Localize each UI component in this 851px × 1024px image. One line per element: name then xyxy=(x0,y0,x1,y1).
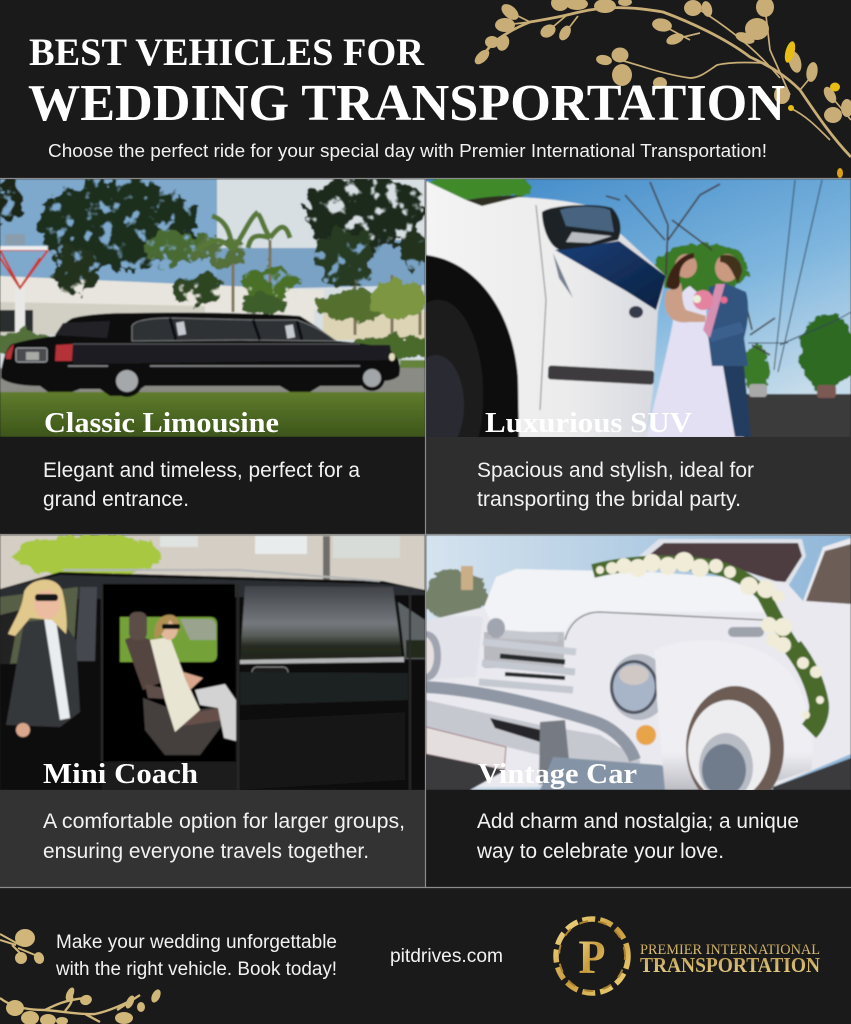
panel: luxurious SUV xyxy=(393,171,851,534)
footer call to action xyxy=(55,932,337,980)
footer call to action: with the right vehicle. Book today! xyxy=(55,959,337,980)
description text: grand entrance. xyxy=(43,488,189,511)
description text xyxy=(43,459,360,511)
title line 2: WEDDING TRANSPORTATION xyxy=(28,75,785,132)
logo wordmark: TRANSPORTATION xyxy=(640,953,820,977)
panel: vintage car xyxy=(424,535,851,887)
title xyxy=(28,31,785,132)
description text: Elegant and timeless, perfect for a xyxy=(43,459,360,482)
website: pitdrives.com xyxy=(390,946,503,967)
footer decoration: gold branches xyxy=(0,929,163,1024)
photo: limousine xyxy=(0,174,435,437)
panel description xyxy=(0,790,425,887)
description text xyxy=(476,810,799,863)
subtitle: Choose the perfect ride for your special day with Premier International Transportation! xyxy=(48,140,767,161)
description text: transporting the bridal party. xyxy=(477,488,741,511)
photo: black van with two women xyxy=(0,534,425,790)
logo wordmark xyxy=(640,942,820,977)
header decoration: gold branches xyxy=(472,0,851,178)
panel description xyxy=(426,790,851,887)
description text: A comfortable option for larger groups, xyxy=(43,810,405,833)
logo xyxy=(556,919,820,993)
logo emblem: P xyxy=(578,931,606,984)
photo: bride and groom with white SUV xyxy=(426,179,851,437)
logo wordmark: PREMIER INTERNATIONAL xyxy=(640,942,820,958)
panel heading: Classic Limousine xyxy=(44,407,279,439)
panel: classic limousine xyxy=(0,179,425,510)
panel heading: Luxurious SUV xyxy=(485,407,692,439)
description text: Add charm and nostalgia; a unique xyxy=(477,810,799,833)
panel description xyxy=(0,437,425,534)
description text xyxy=(477,459,754,511)
footer call to action: Make your wedding unforgettable xyxy=(56,932,337,953)
logo emblem xyxy=(556,919,628,993)
description text: Spacious and stylish, ideal for xyxy=(477,459,754,482)
title line 1: BEST VEHICLES FOR xyxy=(29,31,425,74)
description text: way to celebrate your love. xyxy=(476,840,724,863)
panel heading: Mini Coach xyxy=(43,758,198,790)
description text: ensuring everyone travels together. xyxy=(43,840,369,863)
panel description xyxy=(426,437,851,534)
description text xyxy=(43,810,405,863)
panel: mini coach xyxy=(0,534,425,887)
panel heading: Vintage Car xyxy=(478,758,637,790)
photo: white vintage car with floral garland xyxy=(424,535,851,810)
